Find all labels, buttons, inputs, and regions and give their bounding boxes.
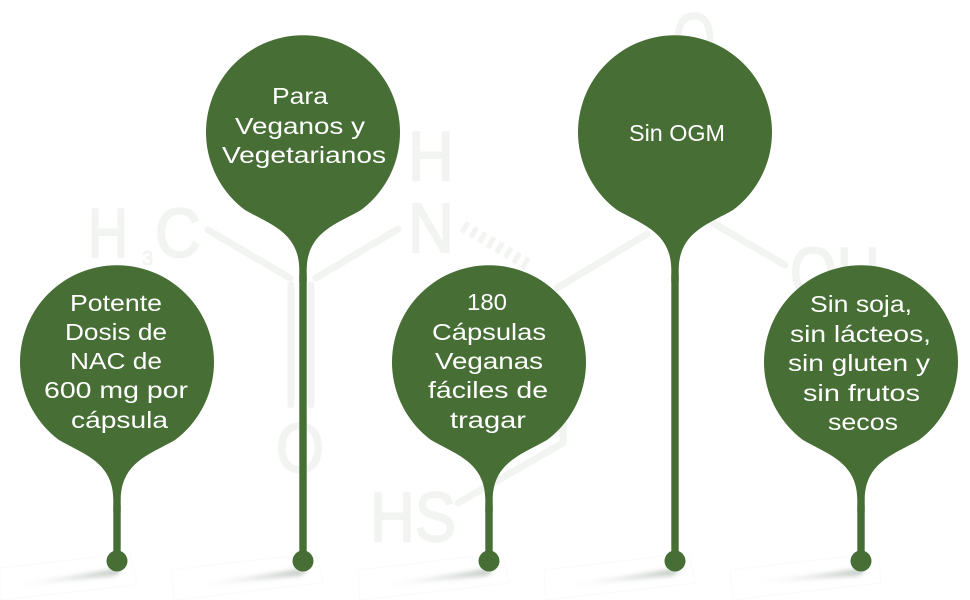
molecule watermark background: HS xyxy=(370,478,456,556)
molecule watermark background: C xyxy=(155,194,201,272)
pin 3: 180 capsulas: Veganas xyxy=(435,348,543,374)
pin 2: para veganos xyxy=(206,35,400,572)
pin 4: sin OGM xyxy=(578,35,772,572)
pin 1: potente dosis: 600 mg por xyxy=(44,377,188,403)
pin 1: potente dosis: NAC de xyxy=(70,348,162,374)
pin 5: sin soja: sin lácteos, xyxy=(790,321,931,347)
pin 2: para veganos: Para xyxy=(272,83,328,109)
pin 3: 180 capsulas: Cápsulas xyxy=(432,319,546,345)
molecule watermark background xyxy=(88,0,880,556)
pin 5: sin soja: Sin soja, xyxy=(810,291,912,317)
ground shadows xyxy=(0,553,881,600)
pin 1: potente dosis: cápsula xyxy=(71,407,168,433)
pin 1: potente dosis xyxy=(20,265,214,572)
pin 3: 180 capsulas: tragar xyxy=(450,407,526,433)
pin 5: sin soja: secos xyxy=(828,409,898,435)
pin 1: potente dosis: Dosis de xyxy=(65,319,167,345)
pin 5: sin soja: sin frutos xyxy=(803,380,920,406)
pin 5: sin soja: sin gluten y xyxy=(788,350,931,376)
pin 3: 180 capsulas: 180 xyxy=(467,289,507,315)
pin 2: para veganos: Veganos y xyxy=(235,113,366,139)
molecule watermark background: H xyxy=(408,117,454,195)
pin 3: 180 capsulas xyxy=(392,265,586,572)
pin 5: sin soja xyxy=(764,265,958,572)
molecule watermark background: O xyxy=(673,0,715,77)
pin 4: sin OGM: Sin OGM xyxy=(629,120,725,146)
pin 2: para veganos: Vegetarianos xyxy=(222,142,386,168)
molecule watermark background: OH xyxy=(790,233,880,311)
molecule watermark background: N xyxy=(408,189,454,267)
molecule watermark background: 3 xyxy=(142,248,153,270)
molecule watermark background: O xyxy=(276,409,324,487)
pin 1: potente dosis: Potente xyxy=(70,290,162,316)
pin 3: 180 capsulas: fáciles de xyxy=(428,377,548,403)
molecule watermark background: H xyxy=(88,194,128,272)
